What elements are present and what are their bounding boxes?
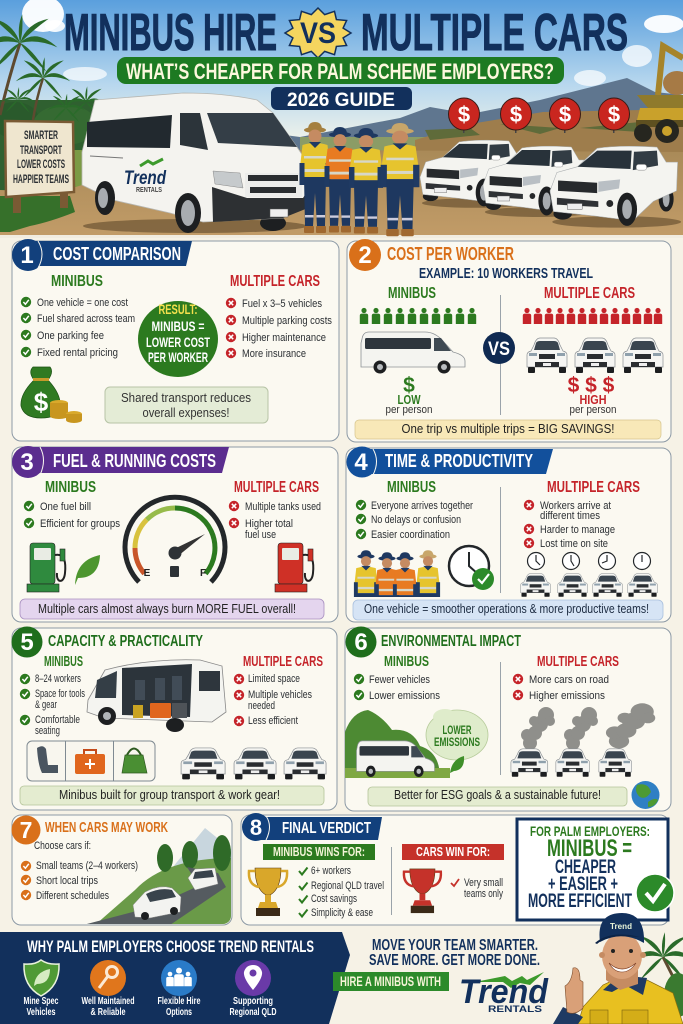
heading: cost per worker bbox=[349, 239, 514, 271]
sign: smarter transport bbox=[5, 121, 74, 213]
heading: when cars may work bbox=[12, 816, 168, 844]
workers group bbox=[300, 122, 419, 236]
heading: when cars may work: WHEN CARS MAY WORK bbox=[45, 819, 168, 836]
minibus benefits list: One vehicle = one cost bbox=[37, 297, 128, 309]
icon: location pin: Supporting bbox=[233, 995, 273, 1007]
icon: minibus bbox=[361, 332, 465, 374]
call to action: SAVE MORE. GET MORE DONE. bbox=[369, 952, 540, 969]
callout bbox=[355, 420, 661, 439]
icon: green fuel pump bbox=[27, 543, 65, 592]
heading: cost comparison: 1 bbox=[20, 242, 34, 269]
callout: Minibus built for group transport & work gear! bbox=[59, 787, 280, 802]
cars fuel list bbox=[229, 501, 321, 541]
lower emissions cloud bbox=[426, 709, 488, 773]
icon: dollar balloons bbox=[448, 98, 630, 133]
minibus wins list bbox=[299, 865, 384, 919]
minibus time list: Easier coordination bbox=[371, 529, 450, 541]
cars time list bbox=[524, 500, 615, 550]
panel: 6 environmental impact bbox=[345, 626, 671, 811]
high cost label bbox=[568, 374, 616, 416]
cars environment list: Higher emissions bbox=[529, 690, 605, 702]
result circle: RESULT: bbox=[158, 301, 198, 317]
icon: dollar balloons: $ bbox=[608, 102, 620, 127]
verdict callout box: + EASIER + bbox=[548, 874, 618, 895]
heading: fuel and running costs bbox=[12, 446, 229, 478]
icon: three cars bbox=[181, 748, 326, 779]
hero banner bbox=[0, 0, 683, 238]
list of cases: Short local trips bbox=[36, 875, 98, 887]
label: hire a minibus: HIRE A MINIBUS WITH bbox=[340, 973, 441, 989]
multiple cars list: Fuel x 3–5 vehicles bbox=[242, 298, 322, 310]
mascot with thumbs up and palm: Trend bbox=[610, 922, 632, 931]
heading: time and productivity: TIME & PRODUCTIVITY bbox=[385, 451, 533, 471]
minibus fuel list: Efficient for groups bbox=[40, 518, 120, 530]
white minibus with Trend logo: RENTALS bbox=[136, 187, 162, 194]
fuel gauge: E bbox=[144, 568, 151, 579]
low cost label: per person bbox=[386, 404, 432, 416]
heading: cost comparison: COST COMPARISON bbox=[53, 244, 181, 264]
lower emissions cloud: LOWER bbox=[442, 723, 472, 737]
minibus capacity list: Space for tools bbox=[35, 688, 85, 700]
icon: ten green workers bbox=[360, 308, 476, 324]
icon: dollar balloons: $ bbox=[559, 102, 571, 127]
label: hire a minibus bbox=[333, 972, 449, 991]
verdict callout box: MINIBUS = bbox=[547, 835, 632, 862]
panel: 4 time and productivity: MULTIPLE CARS bbox=[547, 479, 640, 496]
minibus with open side door bbox=[87, 660, 226, 732]
minibus capacity list: seating bbox=[35, 725, 60, 737]
minibus wins list: 6+ workers bbox=[311, 865, 351, 877]
minibus time list: Everyone arrives together bbox=[371, 500, 473, 512]
multiple cars list: More insurance bbox=[242, 348, 306, 360]
icon: location pin: Regional QLD bbox=[230, 1006, 277, 1018]
multiple cars list bbox=[226, 298, 332, 360]
minibus fuel list bbox=[24, 501, 120, 530]
panel: 1 cost comparison: MINIBUS bbox=[51, 273, 103, 290]
callout bbox=[20, 599, 324, 619]
icon strip: seat, first aid kit, tool bag bbox=[27, 741, 155, 781]
label: cars win: CARS WIN FOR: bbox=[416, 844, 490, 859]
sign: smarter transport: SMARTER bbox=[24, 128, 58, 142]
icon: big check bbox=[636, 874, 674, 912]
result circle: LOWER COST bbox=[146, 334, 210, 350]
panel: 5 capacity and practicality bbox=[12, 626, 337, 810]
high cost label: HIGH bbox=[580, 392, 606, 407]
cars environment list: More cars on road bbox=[529, 674, 609, 686]
callout bbox=[105, 387, 268, 423]
icon: three cars bbox=[527, 338, 663, 373]
heading: final verdict: FINAL VERDICT bbox=[282, 820, 371, 837]
icon: smoke clouds bbox=[521, 703, 655, 750]
panel: 2 cost per worker bbox=[347, 239, 671, 442]
multiple cars list: Higher maintenance bbox=[242, 332, 326, 344]
minibus fuel list: One fuel bill bbox=[40, 501, 91, 513]
icon: money bag and coins bbox=[21, 367, 82, 423]
icon: key bbox=[82, 960, 134, 1018]
guide pill bbox=[271, 87, 412, 111]
icon: mine spec shield: Mine Spec bbox=[24, 995, 59, 1007]
minibus capacity list: Comfortable bbox=[35, 714, 80, 726]
heading: time and productivity: 4 bbox=[354, 449, 368, 476]
icon: globe bbox=[632, 781, 660, 809]
minibus benefits list: One parking fee bbox=[37, 330, 104, 342]
sign: smarter transport: TRANSPORT bbox=[20, 143, 62, 157]
heading: fuel and running costs: FUEL & RUNNING COSTS bbox=[53, 451, 216, 471]
icon: first aid kit bbox=[75, 750, 105, 774]
call to action: MOVE YOUR TEAM SMARTER. bbox=[372, 937, 538, 954]
icon: vs circle bbox=[483, 332, 515, 364]
cars capacity list: Limited space bbox=[248, 673, 300, 685]
title: MINIBUS HIRE bbox=[64, 4, 277, 62]
icon: red trophy bbox=[404, 869, 441, 913]
minibus benefits list: Fixed rental pricing bbox=[37, 347, 118, 359]
heading: capacity and practicality: CAPACITY & PRACTICALITY bbox=[48, 633, 203, 650]
minibus wins list: Regional QLD travel bbox=[311, 880, 384, 892]
icon: palm trees bbox=[0, 14, 106, 122]
sign: smarter transport: LOWER COSTS bbox=[17, 157, 65, 171]
callout: Better for ESG goals & a sustainable future! bbox=[394, 787, 601, 802]
panel: 5 capacity and practicality: MULTIPLE CARS bbox=[243, 653, 323, 670]
heading: when cars may work: 7 bbox=[20, 817, 32, 843]
panel: 6 environmental impact: MINIBUS bbox=[384, 653, 429, 670]
heading: environmental impact: ENVIRONMENTAL IMPACT bbox=[381, 633, 521, 650]
cars environment list bbox=[513, 674, 609, 702]
callout bbox=[20, 786, 324, 805]
icon: key: Well Maintained bbox=[82, 995, 134, 1007]
list of cases: Small teams (2–4 workers) bbox=[36, 860, 138, 872]
heading: cost per worker: COST PER WORKER bbox=[387, 244, 514, 264]
cars time list: Lost time on site bbox=[540, 538, 608, 550]
icon: seat bbox=[37, 746, 58, 773]
panel: 5 capacity and practicality: MINIBUS bbox=[44, 653, 83, 670]
icon: leaf bbox=[75, 555, 100, 585]
minibus capacity list: & gear bbox=[35, 699, 57, 711]
cars capacity list: needed bbox=[248, 700, 275, 712]
heading: time and productivity bbox=[346, 446, 553, 478]
logo: trend rentals: RENTALS bbox=[488, 1004, 542, 1014]
minibus time list bbox=[356, 500, 473, 541]
icon: people: Options bbox=[166, 1006, 192, 1018]
icon: location pin bbox=[230, 960, 277, 1018]
callout bbox=[368, 787, 627, 806]
workers arriving together bbox=[354, 550, 440, 597]
icon: mine spec shield: Vehicles bbox=[26, 1006, 56, 1018]
minibus environment list: Fewer vehicles bbox=[369, 674, 430, 686]
cars fuel list: fuel use bbox=[245, 529, 276, 541]
panel: 4 time and productivity: MINIBUS bbox=[387, 479, 436, 496]
icon: people: Flexible Hire bbox=[158, 995, 201, 1007]
white utes bbox=[420, 140, 681, 228]
icon: four clocks bbox=[528, 552, 650, 570]
panel: 7 when cars may work bbox=[12, 815, 232, 925]
high cost label: per person bbox=[570, 404, 616, 416]
cars wins list bbox=[451, 877, 503, 900]
icon: vs circle: VS bbox=[488, 339, 510, 360]
fuel gauge: F bbox=[200, 568, 206, 579]
icon: mine spec shield bbox=[24, 960, 59, 1018]
mascot with thumbs up and palm bbox=[553, 913, 683, 1024]
panel: 1 cost comparison bbox=[12, 239, 339, 441]
icon: four cars bbox=[521, 574, 657, 597]
panel: 7 when cars may work: Choose cars if: bbox=[34, 840, 91, 852]
heading: fuel and running costs: 3 bbox=[20, 449, 34, 476]
icon: three cars with emissions bbox=[511, 749, 632, 777]
low cost label: LOW bbox=[398, 392, 421, 407]
icon: green bag bbox=[122, 748, 147, 773]
heading: capacity and practicality bbox=[12, 626, 203, 658]
white minibus with Trend logo: Trend bbox=[124, 168, 166, 189]
callout: overall expenses! bbox=[142, 405, 230, 420]
panel: 2 cost per worker: EXAMPLE: 10 WORKERS TRAVEL bbox=[419, 265, 593, 282]
icon: red fuel pump bbox=[275, 543, 313, 592]
heading: environmental impact bbox=[346, 626, 521, 658]
minibus benefits list: Fuel shared across team bbox=[37, 313, 135, 325]
list of cases bbox=[21, 860, 138, 902]
icon: money bag and coins: $ bbox=[34, 387, 49, 417]
cars time list: Harder to manage bbox=[540, 524, 615, 536]
mining dump truck and excavator bbox=[634, 46, 683, 143]
sign: smarter transport: HAPPIER TEAMS bbox=[13, 172, 69, 186]
icon: dollar balloons: $ bbox=[510, 102, 522, 127]
scene: trees and clean minibus bbox=[345, 710, 450, 778]
logo: trend rentals: Trend bbox=[459, 973, 549, 1011]
cars fuel list: Multiple tanks used bbox=[245, 501, 321, 513]
icon: people bbox=[158, 960, 201, 1018]
cars wins list: teams only bbox=[464, 888, 503, 900]
heading: cost comparison bbox=[12, 239, 192, 271]
callout bbox=[353, 600, 663, 620]
result circle: PER WORKER bbox=[148, 349, 208, 365]
panel: 3 fuel and running costs bbox=[12, 446, 338, 622]
cars wins list: Very small bbox=[464, 877, 503, 889]
panel: 8 final verdict bbox=[241, 813, 669, 925]
panel: 3 fuel and running costs: MULTIPLE CARS bbox=[234, 479, 319, 496]
call to action bbox=[333, 937, 549, 1014]
icon: clock with check bbox=[449, 546, 494, 590]
minibus time list: No delays or confusion bbox=[371, 514, 461, 526]
verdict callout box: CHEAPER bbox=[555, 857, 616, 878]
heading: capacity and practicality: 5 bbox=[20, 629, 34, 656]
result circle: MINIBUS = bbox=[152, 318, 204, 334]
minibus environment list: Lower emissions bbox=[369, 690, 440, 702]
panel: 2 cost per worker: MINIBUS bbox=[388, 285, 436, 302]
guide pill: 2026 GUIDE bbox=[287, 90, 395, 111]
panel: 1 cost comparison: MULTIPLE CARS bbox=[230, 273, 320, 290]
minibus wins list: Cost savings bbox=[311, 893, 357, 905]
heading: final verdict: 8 bbox=[250, 815, 262, 840]
minibus benefits list bbox=[21, 297, 135, 359]
callout: One trip vs multiple trips = BIG SAVINGS! bbox=[402, 421, 614, 436]
low cost label bbox=[386, 374, 432, 416]
title bbox=[66, 7, 628, 57]
cars capacity list bbox=[234, 673, 312, 727]
fuel gauge bbox=[125, 497, 225, 582]
minibus capacity list: 8–24 workers bbox=[35, 673, 81, 685]
cars time list: Workers arrive at bbox=[540, 500, 611, 512]
icon: dollar balloons: $ bbox=[458, 102, 470, 127]
heading: environmental impact: 6 bbox=[354, 629, 368, 656]
scene: winding road with cars bbox=[83, 828, 232, 925]
title: VS bbox=[300, 17, 336, 50]
label: minibus wins: MINIBUS WINS FOR: bbox=[273, 844, 365, 859]
white minibus with Trend logo bbox=[82, 93, 310, 233]
heading: cost per worker: 2 bbox=[358, 242, 372, 269]
verdict callout box bbox=[517, 819, 674, 920]
footer panel: why palm employers choose trend rentals bbox=[0, 932, 350, 1024]
panel: 2 cost per worker: MULTIPLE CARS bbox=[544, 285, 635, 302]
minibus capacity list bbox=[20, 673, 85, 737]
minibus environment list bbox=[354, 674, 440, 702]
icon: key: & Reliable bbox=[90, 1006, 126, 1018]
footer panel: why palm employers choose trend rentals: WHY PALM EMPLOYERS CHOOSE TREND RENTALS bbox=[27, 937, 314, 956]
cars fuel list: Higher total bbox=[245, 518, 293, 530]
panel: 6 environmental impact: MULTIPLE CARS bbox=[537, 653, 619, 670]
panel: 3 fuel and running costs: MINIBUS bbox=[45, 479, 96, 496]
callout: Shared transport reduces bbox=[121, 390, 251, 405]
minibus wins list: Simplicity & ease bbox=[311, 907, 373, 919]
cars capacity list: Multiple vehicles bbox=[248, 689, 312, 701]
result circle bbox=[138, 301, 218, 377]
cars time list: different times bbox=[540, 510, 600, 522]
cars capacity list: Less efficient bbox=[248, 715, 298, 727]
low cost label: $ bbox=[403, 374, 415, 397]
multiple cars list: Multiple parking costs bbox=[242, 315, 332, 327]
heading: final verdict bbox=[242, 813, 382, 841]
high cost label: $ $ $ bbox=[568, 374, 615, 397]
lower emissions cloud: EMISSIONS bbox=[434, 735, 480, 749]
icon: gold trophy bbox=[249, 868, 287, 916]
icon: red workers bbox=[523, 308, 662, 324]
callout: Multiple cars almost always burn MORE FUEL overall! bbox=[38, 601, 296, 616]
list of cases: Different schedules bbox=[36, 890, 109, 902]
panel: 4 time and productivity bbox=[346, 446, 671, 639]
